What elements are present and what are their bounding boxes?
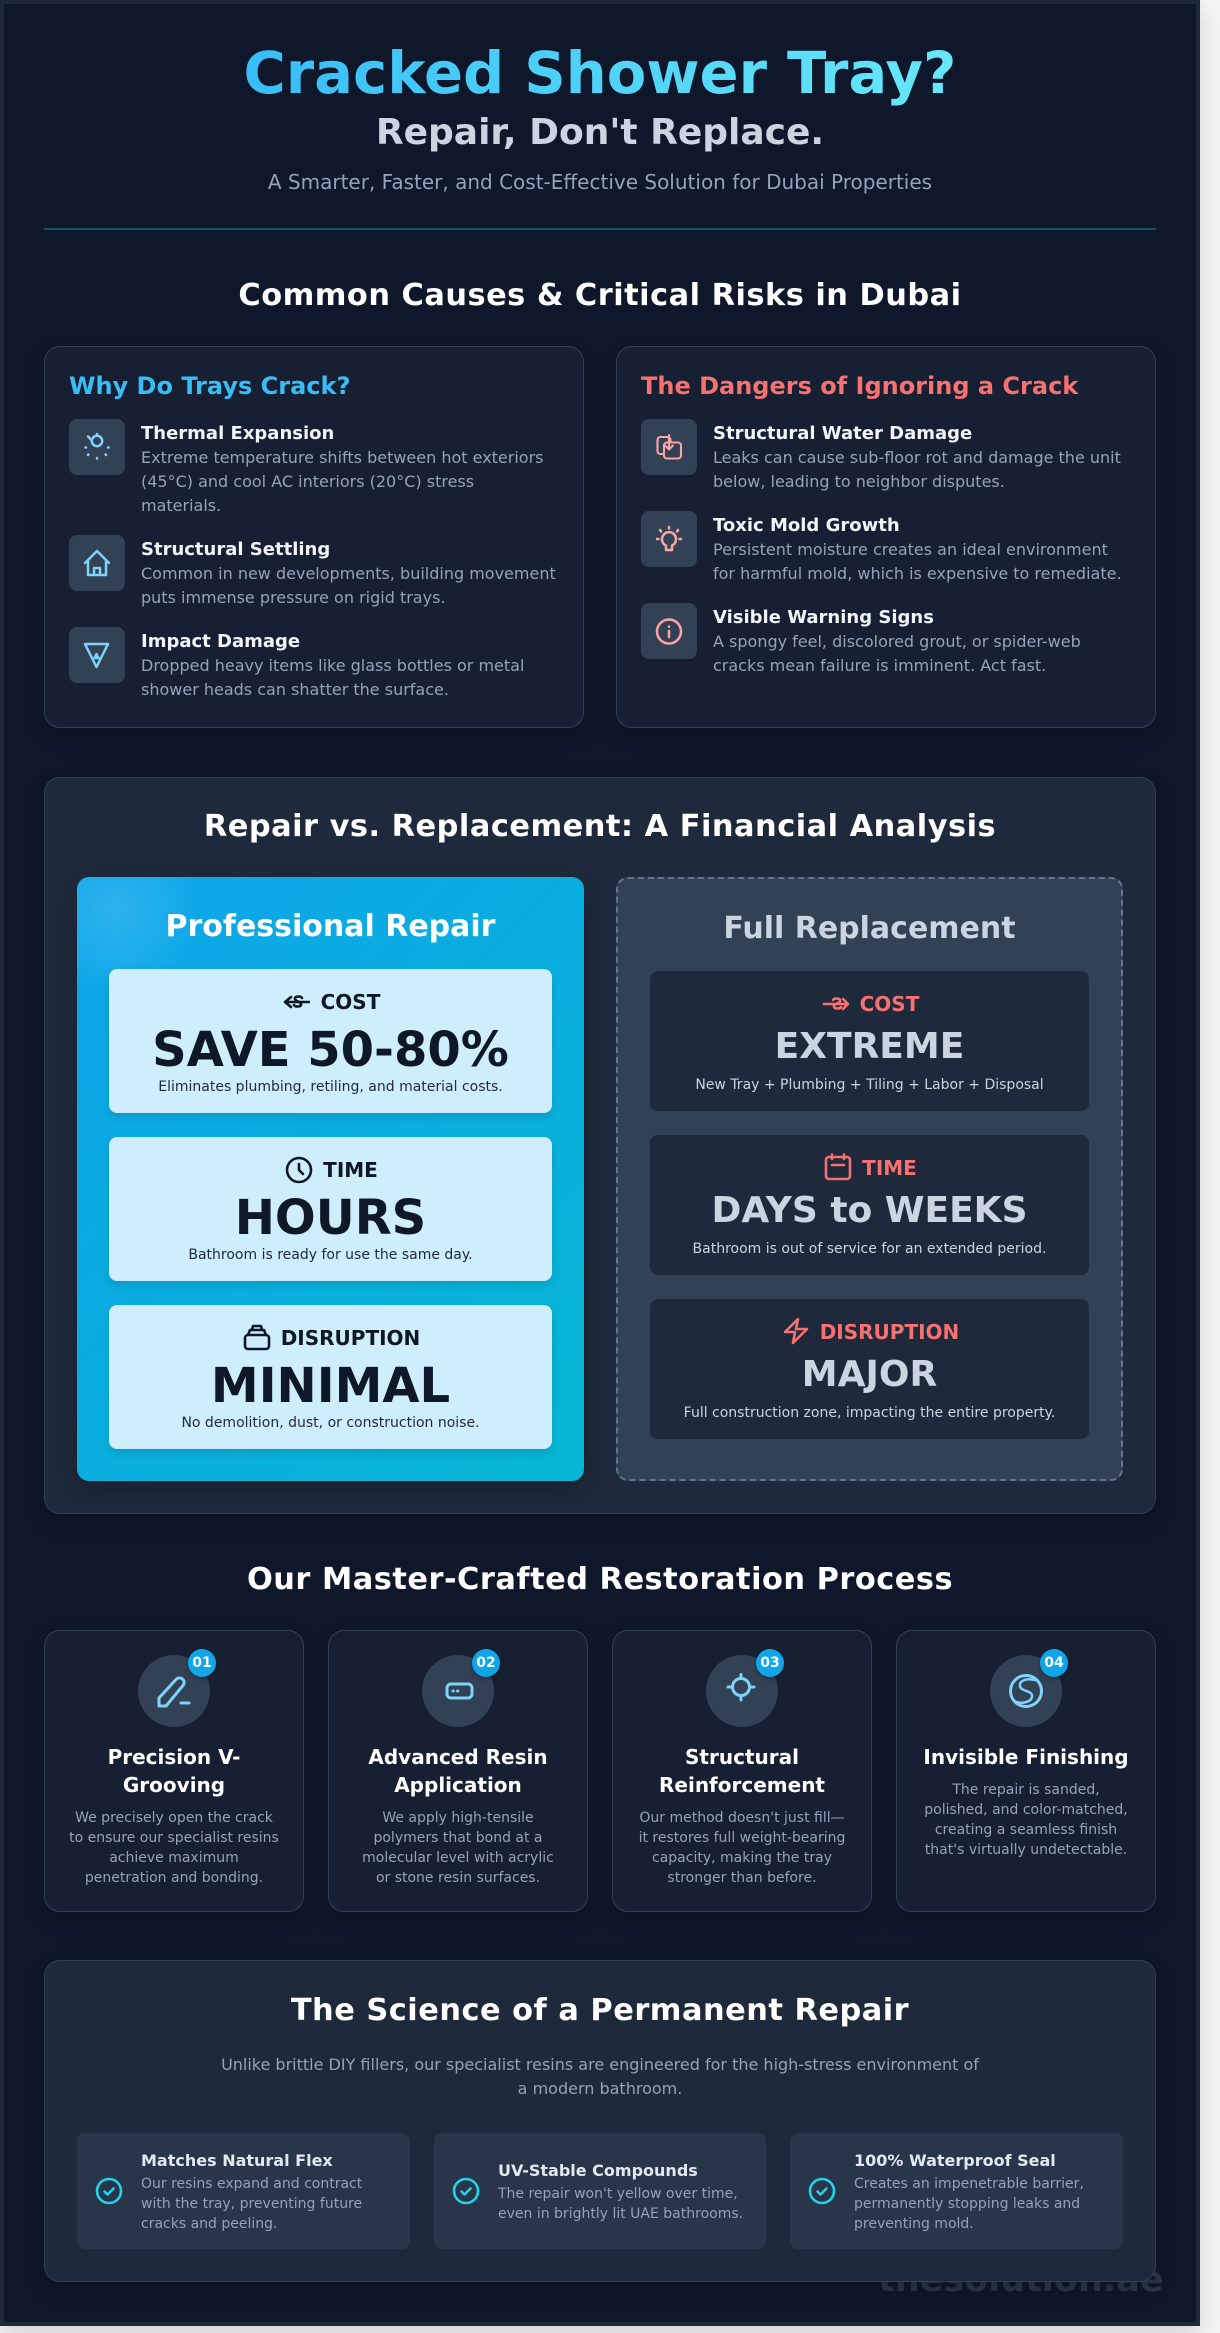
danger: water damage: below, leading to neighbor disputes.	[713, 472, 1005, 491]
metric: replacement cost	[650, 971, 1089, 1111]
step title	[659, 1745, 825, 1797]
heading: full replacement: Full Replacement	[723, 911, 1016, 946]
cause: thermal expansion: Extreme temperature shifts between hot exteriors	[141, 448, 544, 467]
feature: uv stable: UV-Stable Compounds	[498, 2161, 698, 2180]
badge 02: 02	[476, 1655, 496, 1671]
step text: Our method doesn't just fill—	[639, 1810, 845, 1826]
cause: impact damage: shower heads can shatter the surface.	[141, 680, 449, 699]
feature: natural flex: Our resins expand and contract	[141, 2176, 362, 2192]
panel: science of a permanent repair	[44, 1960, 1156, 2282]
feature: waterproof seal: preventing mold.	[854, 2216, 974, 2232]
metric: repair time: TIME	[323, 1158, 378, 1182]
metric: replacement disruption: Full construction zone, impacting the entire property.	[684, 1405, 1055, 1421]
metric: replacement cost: EXTREME	[775, 1026, 964, 1067]
icon: resin	[422, 1655, 494, 1727]
icon: clock	[286, 1156, 312, 1184]
step 2	[328, 1630, 588, 1912]
badge 02	[472, 1649, 500, 1677]
danger: toxic mold: Persistent moisture creates an ideal environment	[713, 540, 1108, 559]
metric: repair cost: Eliminates plumbing, retiling, and material costs.	[158, 1079, 503, 1095]
cause: structural settling: Structural Settling	[141, 539, 330, 560]
metric: repair time: HOURS	[235, 1190, 426, 1246]
metric: replacement time: DAYS to WEEKS	[711, 1190, 1028, 1231]
icon: layers	[244, 1324, 270, 1350]
icon: cost arrow	[822, 997, 850, 1010]
panel heading: The Dangers of Ignoring a Crack	[641, 372, 1078, 400]
step 1	[44, 1630, 304, 1912]
step title	[368, 1745, 548, 1797]
badge 04	[1040, 1649, 1068, 1677]
feature: waterproof seal	[790, 2133, 1123, 2249]
step text: polymers that bond at a	[373, 1830, 543, 1846]
metric: repair cost	[109, 969, 552, 1113]
feature: natural flex: Matches Natural Flex	[141, 2151, 333, 2170]
heading: restoration process: Our Master-Crafted Restoration Process	[247, 1562, 953, 1597]
metric: replacement time: Bathroom is out of service for an extended period.	[693, 1241, 1046, 1257]
step title: Reinforcement	[659, 1773, 825, 1797]
title: Cracked Shower Tray?	[244, 40, 956, 107]
danger: toxic mold: Toxic Mold Growth	[713, 515, 900, 536]
step text: creating a seamless finish	[935, 1822, 1117, 1838]
metric: repair cost: COST	[321, 990, 380, 1014]
feature: waterproof seal: 100% Waterproof Seal	[854, 2151, 1056, 2170]
danger: warning signs: cracks mean failure is imminent. Act fast.	[713, 656, 1046, 675]
icon: thermal	[69, 419, 125, 475]
step text: The repair is sanded,	[952, 1782, 1100, 1798]
subtitle: Repair, Don't Replace.	[376, 112, 824, 153]
badge 01	[188, 1649, 216, 1677]
danger: water damage: Structural Water Damage	[713, 423, 972, 444]
danger: warning signs	[713, 607, 1081, 675]
feature: uv stable	[434, 2133, 766, 2249]
feature: uv stable: The repair won't yellow over time,	[498, 2186, 738, 2202]
cause: thermal expansion: materials.	[141, 496, 221, 515]
badge 01: 01	[192, 1655, 212, 1671]
metric: repair disruption: No demolition, dust, or construction noise.	[181, 1415, 480, 1431]
metric: replacement disruption: DISRUPTION	[820, 1320, 959, 1344]
metric: repair disruption: MINIMAL	[211, 1358, 450, 1414]
icon: pencil	[138, 1655, 210, 1727]
step text: We apply high-tensile	[382, 1810, 534, 1826]
cause: impact damage: Dropped heavy items like glass bottles or metal	[141, 656, 524, 675]
step title: Application	[394, 1773, 522, 1797]
panel: financial analysis	[44, 777, 1156, 1514]
icon: calendar	[824, 1153, 852, 1180]
feature: natural flex: cracks and peeling.	[141, 2216, 277, 2232]
step title: Precision V-	[108, 1745, 240, 1769]
step text: molecular level with acrylic	[362, 1850, 554, 1866]
step text	[639, 1810, 845, 1886]
step text: penetration and bonding.	[85, 1870, 263, 1886]
metric: repair time: Bathroom is ready for use the same day.	[188, 1247, 473, 1263]
icon: check	[96, 2178, 122, 2204]
cause: thermal expansion	[141, 423, 544, 515]
step text: capacity, making the tray	[652, 1850, 832, 1866]
step text: or stone resin surfaces.	[376, 1870, 540, 1886]
heading: financial analysis: Repair vs. Replacement: A Financial Analysis	[204, 809, 996, 844]
step text: it restores full weight-bearing	[639, 1830, 845, 1846]
icon: lightning	[784, 1318, 808, 1344]
intro text: a modern bathroom.	[518, 2079, 682, 2098]
metric: repair disruption: DISRUPTION	[281, 1326, 420, 1350]
danger: water damage	[713, 423, 1121, 491]
feature: waterproof seal: Creates an impenetrable barrier,	[854, 2176, 1084, 2192]
icon: check	[452, 2178, 480, 2204]
feature: uv stable: even in brightly lit UAE bathrooms.	[498, 2206, 743, 2222]
metric: replacement cost: New Tray + Plumbing + Tiling + Labor + Disposal	[695, 1077, 1044, 1093]
danger: water damage: Leaks can cause sub-floor rot and damage the unit	[713, 448, 1121, 467]
tagline: A Smarter, Faster, and Cost-Effective Solution for Dubai Properties	[268, 170, 932, 194]
cause: structural settling: puts immense pressure on rigid trays.	[141, 588, 445, 607]
metric: replacement disruption: MAJOR	[802, 1354, 937, 1395]
danger: warning signs: Visible Warning Signs	[713, 607, 934, 628]
icon: water damage	[641, 419, 697, 475]
card: professional repair	[77, 877, 584, 1481]
cause: thermal expansion: (45°C) and cool AC interiors (20°C) stress	[141, 472, 474, 491]
badge 04: 04	[1044, 1655, 1064, 1671]
cause: impact damage	[141, 631, 524, 699]
metric: repair time	[109, 1137, 552, 1281]
icon: house	[69, 535, 125, 591]
metric: repair cost: SAVE 50-80%	[152, 1022, 509, 1078]
badge 03	[756, 1649, 784, 1677]
icon: reinforcement	[706, 1655, 778, 1727]
icon: info	[641, 603, 697, 659]
step text	[69, 1810, 279, 1886]
panel: dangers of ignoring a crack	[616, 346, 1156, 728]
panel: why do trays crack	[44, 346, 584, 728]
icon: finishing	[990, 1655, 1062, 1727]
step 3	[612, 1630, 872, 1912]
icon: impact	[69, 627, 125, 683]
danger: warning signs: A spongy feel, discolored grout, or spider-web	[713, 632, 1081, 651]
cause: thermal expansion: Thermal Expansion	[141, 423, 334, 444]
badge 03: 03	[760, 1655, 780, 1671]
intro text	[221, 2055, 980, 2098]
step text: achieve maximum	[109, 1850, 239, 1866]
cause: structural settling	[141, 539, 556, 607]
feature: natural flex: with the tray, preventing future	[141, 2196, 362, 2212]
intro text: Unlike brittle DIY fillers, our specialist resins are engineered for the high-stress environment of	[221, 2055, 979, 2074]
cause: structural settling: Common in new developments, building movement	[141, 564, 556, 583]
metric: replacement cost: COST	[860, 992, 919, 1016]
heading: science: The Science of a Permanent Repair	[291, 1993, 909, 2028]
step title: Invisible Finishing	[923, 1745, 1129, 1769]
step text	[362, 1810, 554, 1886]
step text: polished, and color-matched,	[924, 1802, 1128, 1818]
step text: stronger than before.	[667, 1870, 817, 1886]
step title: Structural	[685, 1745, 799, 1769]
heading: causes and risks: Common Causes & Critical Risks in Dubai	[238, 278, 962, 313]
metric: repair disruption	[109, 1305, 552, 1449]
heading: professional repair: Professional Repair	[166, 909, 495, 944]
feature: natural flex	[77, 2133, 410, 2249]
feature: waterproof seal: permanently stopping leaks and	[854, 2196, 1080, 2212]
step 4	[896, 1630, 1156, 1912]
metric: replacement time: TIME	[862, 1156, 917, 1180]
card: full replacement	[616, 877, 1123, 1481]
step text: to ensure our specialist resins	[69, 1830, 279, 1846]
step title: Advanced Resin	[368, 1745, 548, 1769]
step title: Grooving	[123, 1773, 225, 1797]
icon: cost	[284, 995, 310, 1008]
danger: toxic mold	[713, 515, 1122, 583]
metric: replacement disruption	[650, 1299, 1089, 1439]
danger: toxic mold: for harmful mold, which is expensive to remediate.	[713, 564, 1122, 583]
watermark: thesolution.ae	[878, 2260, 1164, 2300]
panel heading: Why Do Trays Crack?	[69, 372, 350, 400]
icon: check	[808, 2178, 836, 2204]
metric: replacement time	[650, 1135, 1089, 1275]
cause: impact damage: Impact Damage	[141, 631, 300, 652]
step title	[108, 1745, 240, 1797]
step text	[924, 1782, 1128, 1858]
step text: that's virtually undetectable.	[925, 1842, 1127, 1858]
step text: We precisely open the crack	[75, 1810, 273, 1826]
icon: light bulb	[641, 511, 697, 567]
